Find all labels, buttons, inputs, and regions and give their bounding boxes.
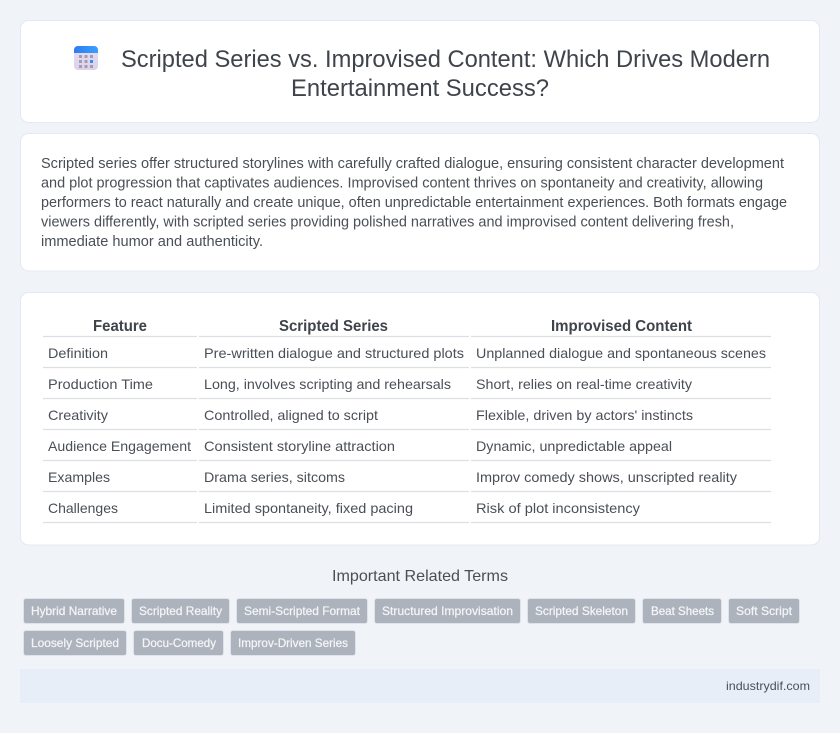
row: production time [48, 376, 692, 392]
row: examples: Improv comedy shows, unscripted reality [476, 469, 737, 485]
tag: Semi-Scripted Format [236, 598, 368, 624]
row: challenges: Risk of plot inconsistency [476, 500, 640, 516]
title: Entertainment Success? [291, 75, 549, 102]
description text: Scripted series offer structured storylines with carefully crafted dialogue, ensuring consistent character development [41, 156, 784, 172]
row: challenges: Limited spontaneity, fixed pacing [204, 500, 413, 516]
row: definition: Unplanned dialogue and spontaneous scenes [476, 345, 766, 361]
row: definition: Pre-written dialogue and structured plots [204, 345, 464, 361]
table grid lines [43, 336, 771, 522]
row: definition: Definition [48, 345, 108, 361]
tag: Semi-Scripted Format: Semi-Scripted Format [244, 604, 361, 618]
row: examples [48, 469, 737, 485]
tag: Structured Improvisation: Structured Improvisation [382, 604, 513, 618]
table header row [93, 318, 693, 335]
row: examples: Examples [48, 469, 110, 485]
title: Scripted Series vs. Improvised Content: Which Drives Modern [121, 46, 770, 73]
description text: immediate humor and authenticity. [41, 234, 263, 250]
footer source text: industrydif.com [726, 679, 810, 693]
table header row: Feature [93, 318, 147, 335]
row: creativity [48, 407, 693, 423]
row: examples: Drama series, sitcoms [204, 469, 345, 485]
row: challenges [48, 500, 640, 516]
tag: Scripted Reality: Scripted Reality [139, 604, 222, 618]
tag: Hybrid Narrative [24, 598, 124, 624]
row: production time: Production Time [48, 376, 153, 392]
tag: Docu-Comedy: Docu-Comedy [142, 636, 216, 650]
tag: Structured Improvisation [374, 598, 520, 624]
description text: and plot progression that captivates audiences. Improvised content thrives on spontaneity and creativity, allowing [41, 176, 763, 192]
tag: Improv-Driven Series: Improv-Driven Series [238, 636, 348, 650]
related terms tags [24, 598, 800, 656]
row: challenges: Challenges [48, 500, 118, 516]
tag: Scripted Skeleton: Scripted Skeleton [535, 604, 628, 618]
row: creativity: Controlled, aligned to script [204, 407, 378, 423]
description panel [20, 134, 820, 271]
row: creativity: Creativity [48, 407, 108, 423]
tag: Soft Script [728, 598, 800, 624]
row: production time: Short, relies on real-time creativity [476, 376, 692, 392]
description text [41, 156, 787, 250]
related terms heading: Important Related Terms [332, 568, 508, 585]
tag: Scripted Reality [132, 598, 230, 624]
tag: Beat Sheets [642, 598, 722, 624]
tag: Scripted Skeleton [528, 598, 636, 624]
row: definition [48, 345, 766, 361]
tag: Improv-Driven Series [230, 630, 356, 656]
tag: Beat Sheets: Beat Sheets [651, 604, 714, 618]
header panel [20, 20, 820, 122]
table header row: Scripted Series [279, 318, 388, 335]
tag: Hybrid Narrative: Hybrid Narrative [31, 604, 117, 618]
icon: calendar [74, 46, 98, 70]
title [121, 46, 770, 102]
tag: Docu-Comedy [134, 630, 224, 656]
description text: performers to react naturally and create unique, often unpredictable entertainment experiences. Both formats engage [41, 195, 787, 211]
row: production time: Long, involves scripting and rehearsals [204, 376, 451, 392]
footer bar [20, 669, 820, 703]
tag: Loosely Scripted [24, 630, 126, 656]
row: audience engagement: Audience Engagement [48, 438, 191, 454]
row: creativity: Flexible, driven by actors' instincts [476, 407, 693, 423]
description text: viewers differently, with scripted series providing polished narratives and improvised content delivering fresh, [41, 214, 734, 230]
row: audience engagement: Dynamic, unpredictable appeal [476, 438, 672, 454]
row: audience engagement [48, 438, 672, 454]
comparison table panel [20, 292, 820, 545]
table header row: Improvised Content [551, 318, 693, 335]
tag: Loosely Scripted: Loosely Scripted [31, 636, 119, 650]
row: audience engagement: Consistent storyline attraction [204, 438, 395, 454]
tag: Soft Script: Soft Script [736, 604, 793, 618]
